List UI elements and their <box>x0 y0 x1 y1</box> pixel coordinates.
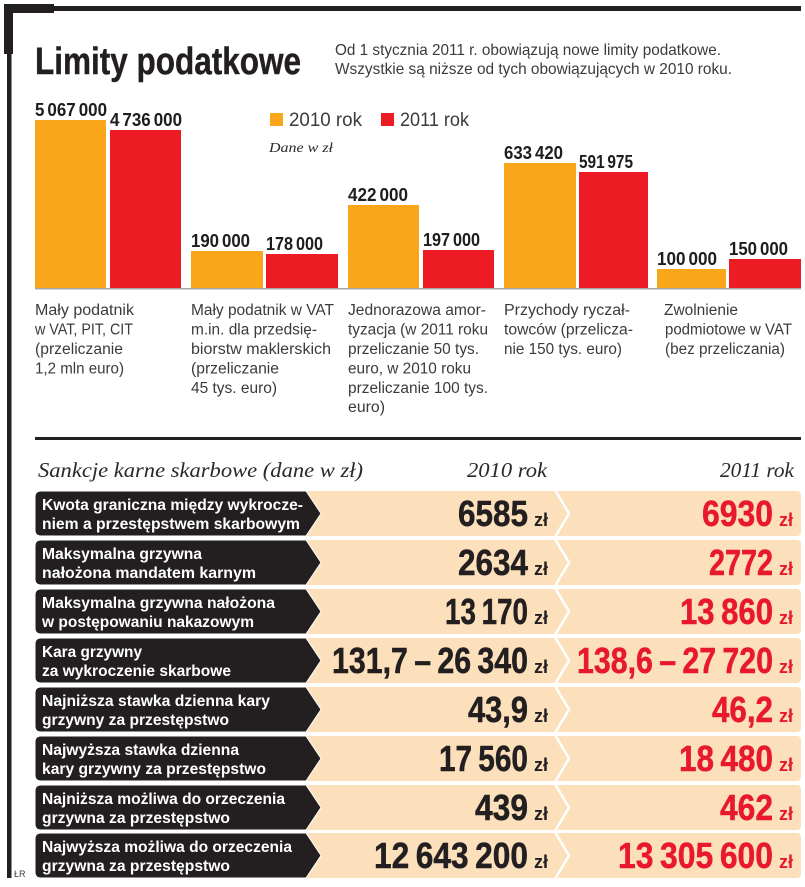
legend: 2010 rok <box>289 110 362 131</box>
group: zwolnienie podmiotowe: 100 000 <box>657 248 717 269</box>
group: mały podatnik <box>35 99 182 288</box>
row 4: zł <box>779 657 793 677</box>
row 8 <box>35 832 801 879</box>
row 8: zł <box>779 852 793 872</box>
row 7: 439 <box>475 787 528 828</box>
group: mały podatnik: 4 736 000 <box>110 109 182 130</box>
row 4: 138,6 – 27 720 <box>577 640 773 681</box>
row 1 <box>35 490 801 537</box>
caption: mały podatnik w VAT: biorstw maklerskich <box>191 341 331 358</box>
row 1: 6585 <box>458 493 528 534</box>
group: jednorazowa amortyzacja: 422 000 <box>348 184 408 205</box>
row 3: Maksymalna grzywna nałożona <box>42 595 275 612</box>
row 5: 43,9 <box>468 689 528 730</box>
group: mały podatnik w VAT <box>191 230 338 288</box>
caption: jednorazowa amortyzacja: przeliczanie 100 tys. <box>348 380 488 397</box>
caption: przychody ryczałtowców: towców (przelicza- <box>504 322 633 338</box>
row 2: zł <box>779 559 793 579</box>
group: zwolnienie podmiotowe <box>657 238 801 288</box>
row 4: zł <box>534 657 548 677</box>
caption: zwolnienie podmiotowe <box>664 302 793 358</box>
row 7: grzywna za przestępstwo <box>42 810 230 827</box>
row 4: za wykroczenie skarbowe <box>42 663 231 680</box>
table heading: 2010 rok <box>467 458 548 482</box>
table heading: Sankcje karne skarbowe (dane w zł) <box>38 458 363 482</box>
group: mały podatnik w VAT: 178 000 <box>266 233 323 254</box>
caption: jednorazowa amortyzacja: euro) <box>348 399 385 416</box>
row 7: zł <box>779 804 793 824</box>
row 4: Kara grzywny <box>42 644 142 661</box>
group: przychody ryczałtowców: 633 420 <box>504 142 563 163</box>
table heading: 2011 rok <box>720 458 795 482</box>
row 6: 17 560 <box>439 738 528 779</box>
row 2: 2772 <box>709 542 773 583</box>
row 8: grzywna za przestępstwo <box>42 858 230 875</box>
caption: przychody ryczałtowców: nie 150 tys. euro) <box>504 341 622 358</box>
table heading <box>38 458 795 482</box>
group: jednorazowa amortyzacja: 197 000 <box>423 229 480 250</box>
author initials: ŁR <box>14 869 26 879</box>
caption: mały podatnik <box>34 302 134 378</box>
caption: mały podatnik w VAT: Mały podatnik w VAT <box>191 302 335 319</box>
caption: mały podatnik: 1,2 mln euro) <box>35 360 124 378</box>
row 3: 13 860 <box>680 591 773 632</box>
row 2: zł <box>534 559 548 579</box>
caption: przychody ryczałtowców <box>504 302 633 358</box>
caption: jednorazowa amortyzacja <box>348 302 488 416</box>
row 5: zł <box>534 706 548 726</box>
row 6: Najwyższa stawka dzienna <box>42 742 239 759</box>
legend: 2011 rok <box>400 110 469 131</box>
row 6: zł <box>534 755 548 775</box>
row 8: 12 643 200 <box>374 835 528 876</box>
row 8: zł <box>534 852 548 872</box>
row 7 <box>35 784 801 831</box>
row 6: kary grzywny za przestępstwo <box>42 761 266 778</box>
bar chart <box>35 99 801 290</box>
row 2 <box>35 539 801 586</box>
intro text: Wszystkie są niższe od tych obowiązujących w 2010 roku. <box>335 61 732 78</box>
caption: mały podatnik w VAT: 45 tys. euro) <box>191 380 277 397</box>
legend <box>268 110 469 155</box>
row 5: zł <box>779 706 793 726</box>
group: przychody ryczałtowców <box>504 142 648 288</box>
row 5 <box>35 686 801 733</box>
row 4 <box>35 637 801 684</box>
caption: jednorazowa amortyzacja: euro, w 2010 roku <box>348 360 471 378</box>
group: jednorazowa amortyzacja <box>348 184 494 288</box>
intro text <box>335 42 732 78</box>
title: Limity podatkowe <box>35 41 301 83</box>
row 3: zł <box>534 608 548 628</box>
row 5: Najniższa stawka dzienna kary <box>42 693 270 710</box>
row 7: zł <box>534 804 548 824</box>
row 4: 131,7 – 26 340 <box>332 640 528 681</box>
row 8: Najwyższa możliwa do orzeczenia <box>42 839 292 856</box>
row 1: niem a przestępstwem skarbowym <box>42 516 300 533</box>
caption: jednorazowa amortyzacja: Jednorazowa amor- <box>348 302 486 319</box>
row 2: 2634 <box>458 542 528 583</box>
row 6 <box>35 735 801 782</box>
caption: mały podatnik w VAT: (przeliczanie <box>191 360 279 378</box>
row 5: grzywny za przestępstwo <box>42 712 229 729</box>
caption: zwolnienie podmiotowe: Zwolnienie <box>664 302 738 319</box>
caption: mały podatnik: (przeliczanie <box>35 341 123 358</box>
row 1: zł <box>779 510 793 530</box>
row 3: zł <box>779 608 793 628</box>
row 3: 13 170 <box>445 591 528 632</box>
group: zwolnienie podmiotowe: 150 000 <box>729 238 788 259</box>
intro text: Od 1 stycznia 2011 r. obowiązują nowe limity podatkowe. <box>335 42 721 59</box>
row 2: nałożona mandatem karnym <box>42 565 256 582</box>
caption: zwolnienie podmiotowe: (bez przeliczania) <box>665 341 785 358</box>
group: mały podatnik: 5 067 000 <box>35 99 107 120</box>
row 5: 46,2 <box>712 689 773 730</box>
caption: jednorazowa amortyzacja: przeliczanie 50 tys. <box>348 341 479 358</box>
caption: przychody ryczałtowców: Przychody ryczał- <box>504 302 630 319</box>
row 8: 13 305 600 <box>618 835 773 876</box>
caption: zwolnienie podmiotowe: podmiotowe w VAT <box>665 322 793 338</box>
row 7: Najniższa możliwa do orzeczenia <box>42 791 285 808</box>
caption: mały podatnik: Mały podatnik <box>35 302 134 319</box>
caption: mały podatnik: w VAT, PIT, CIT <box>34 322 133 338</box>
caption: jednorazowa amortyzacja: tyzacja (w 2011 roku <box>348 322 488 338</box>
row 1: Kwota graniczna między wykrocze- <box>42 497 303 514</box>
caption: mały podatnik w VAT <box>191 302 335 397</box>
caption: mały podatnik w VAT: m.in. dla przedsię- <box>191 322 317 338</box>
row 3: w postępowaniu nakazowym <box>41 614 254 631</box>
row 2: Maksymalna grzywna <box>42 546 202 563</box>
group: mały podatnik w VAT: 190 000 <box>191 230 250 251</box>
legend: Dane w zł <box>268 140 334 155</box>
row 7: 462 <box>720 787 773 828</box>
row 1: 6930 <box>702 493 773 534</box>
row 6: 18 480 <box>679 738 773 779</box>
group: przychody ryczałtowców: 591 975 <box>579 151 633 172</box>
row 1: zł <box>534 510 548 530</box>
row 3 <box>35 588 801 635</box>
row 6: zł <box>779 755 793 775</box>
